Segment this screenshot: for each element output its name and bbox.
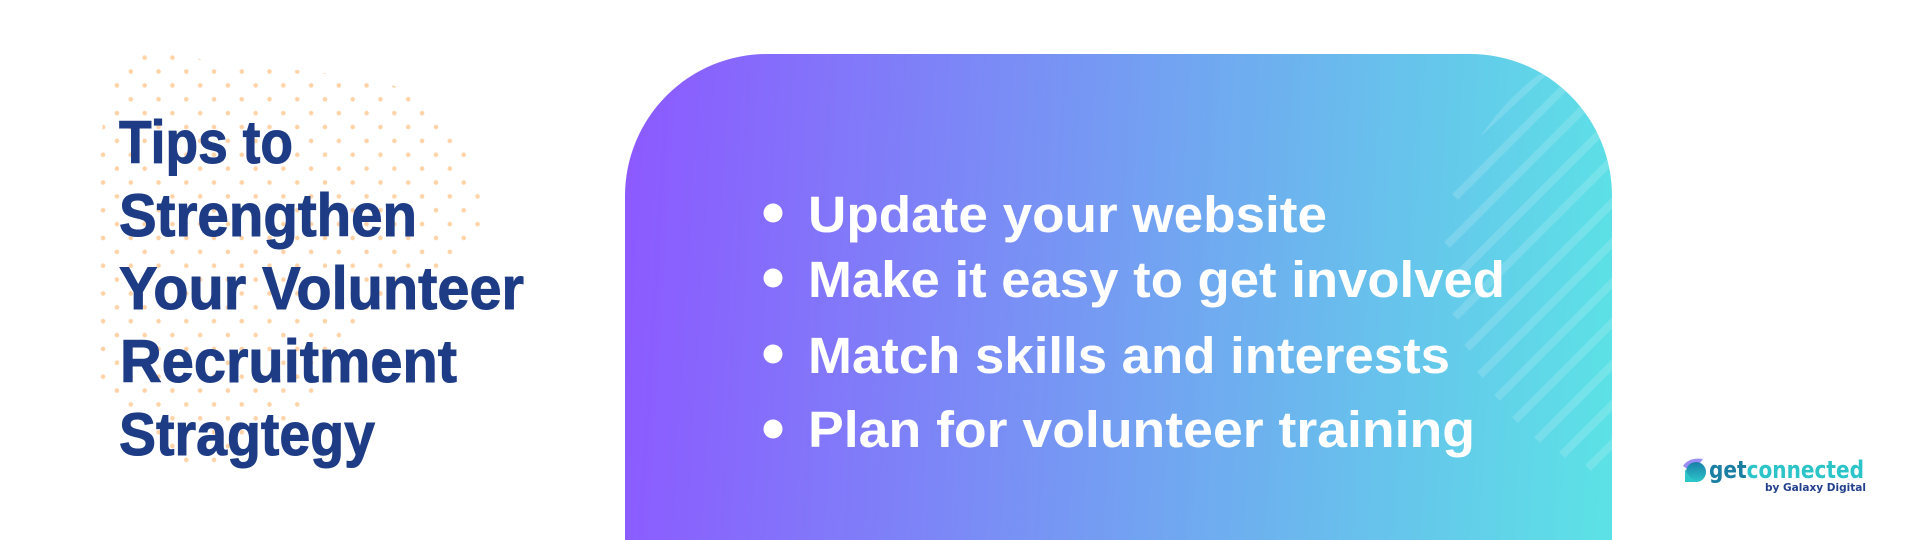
title: Your Volunteer — [119, 255, 524, 322]
list item: make it easy: Make it easy to get involved — [808, 251, 1505, 308]
logo: getconnected by Galaxy Digital — [1683, 456, 1866, 494]
panel: gradient card — [625, 54, 1612, 540]
title: Strengthen — [119, 182, 417, 249]
dot pattern background — [100, 55, 480, 462]
icon: logo mark — [1683, 459, 1706, 482]
logo tagline: by Galaxy Digital — [1765, 482, 1866, 494]
list item: plan for training: Plan for volunteer training — [808, 401, 1475, 458]
title: Recruitment — [120, 328, 457, 395]
title: Stragtegy — [119, 401, 376, 468]
diagonal stripes decoration — [1444, 74, 1612, 471]
title: Tips to — [119, 109, 293, 176]
title — [119, 109, 524, 468]
list item: update your website: Update your website — [808, 186, 1327, 243]
logo wordmark: getconnected — [1709, 456, 1864, 484]
list item: match skills: Match skills and interests — [808, 327, 1450, 384]
